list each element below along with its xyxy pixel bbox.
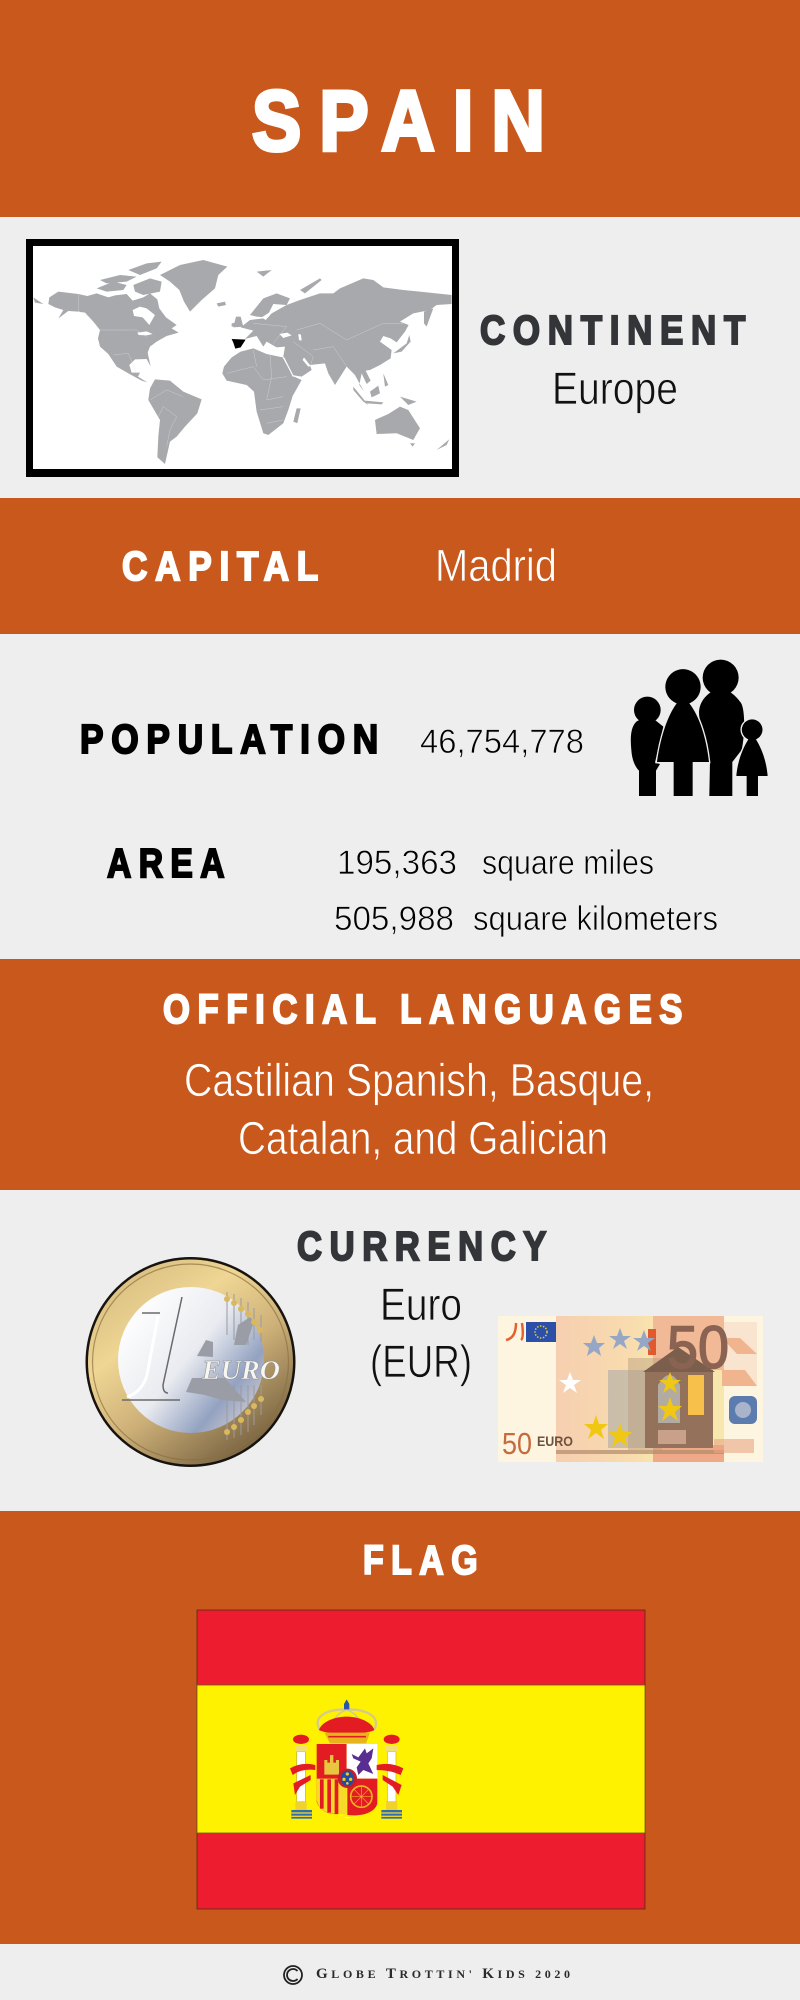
icon: one euro coin: EURO — [201, 1355, 280, 1385]
area values: square kilometers — [473, 900, 718, 938]
header band — [0, 0, 800, 217]
flag heading: FLAG — [363, 1537, 485, 1583]
world map — [26, 239, 459, 477]
capital value: Madrid — [435, 540, 557, 591]
icon: family — [631, 660, 768, 796]
currency name: Euro — [380, 1279, 462, 1330]
panel: population and area — [0, 634, 800, 959]
map water cutouts — [133, 307, 311, 377]
map borders — [78, 294, 403, 447]
area values: 195,363 — [337, 844, 457, 882]
panel: continent — [0, 217, 800, 498]
currency name: (EUR) — [370, 1336, 472, 1387]
footer credit: G LOBE T ROTTIN' K IDS 2020 — [316, 1966, 570, 1982]
flag of Spain — [197, 1610, 645, 1909]
icon: fifty euro banknote: 50 — [502, 1426, 532, 1461]
area heading: AREA — [107, 840, 232, 886]
coat of arms — [290, 1699, 403, 1819]
languages list — [184, 1054, 654, 1164]
panel: capital — [0, 498, 800, 634]
area values: square miles — [482, 844, 654, 882]
area values: 505,988 — [334, 900, 454, 938]
continent value: Europe — [552, 363, 678, 414]
continent heading: CONTINENT — [480, 307, 753, 353]
population value: 46,754,778 — [420, 723, 584, 761]
capital heading: CAPITAL — [122, 543, 326, 589]
panel: official languages — [0, 959, 800, 1190]
languages list: Catalan, and Galician — [238, 1112, 608, 1164]
panel: currency — [0, 1190, 800, 1511]
panel: footer — [0, 1944, 800, 2000]
icon: copyright — [284, 1966, 302, 1984]
icon: fifty euro banknote — [498, 1314, 763, 1462]
area values — [334, 844, 718, 938]
languages list: Castilian Spanish, Basque, — [184, 1054, 654, 1106]
Spain highlighted — [232, 339, 246, 349]
panel: flag — [0, 1511, 800, 1944]
currency heading: CURRENCY — [297, 1223, 554, 1269]
title: SPAIN — [252, 74, 563, 169]
icon: one euro coin — [86, 1257, 296, 1467]
currency name — [370, 1279, 472, 1387]
icon: fifty euro banknote: EURO — [537, 1433, 573, 1449]
languages heading: OFFICIAL LANGUAGES — [163, 986, 690, 1032]
icon: fifty euro banknote: 50 — [667, 1314, 729, 1381]
population heading: POPULATION — [80, 716, 386, 762]
